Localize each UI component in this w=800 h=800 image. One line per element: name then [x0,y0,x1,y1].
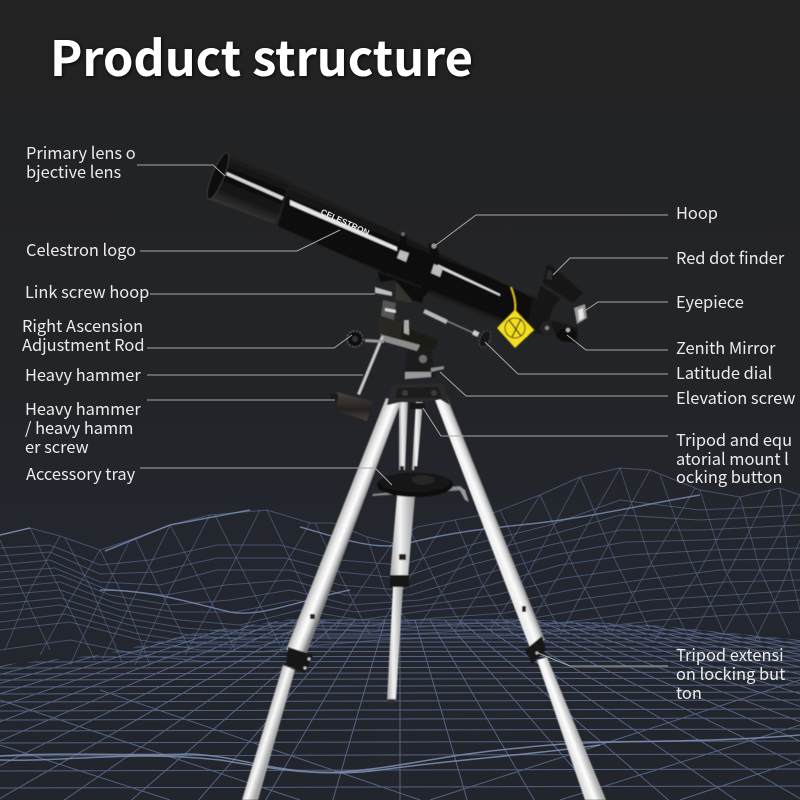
callout: Tripod extension locking button: Tripod extensi [676,642,784,666]
callout: Celestron logo [26,230,340,261]
declination slow-motion rod [423,309,448,324]
elevation screw [431,366,444,372]
callout: Heavy hammer / heavy hammer screw: Heavy hammer [25,396,141,420]
callout: Hoop [436,200,718,245]
tripod: left leg [242,398,401,800]
tripod [242,397,606,800]
callout: Latitude dial: Latitude dial [676,360,772,384]
callout: Latitude dial [485,342,772,384]
callout: Heavy hammer: Heavy hammer [25,362,141,386]
callout: Tripod and equatorial mount locking button: atorial mount l [676,446,789,470]
callout: Accessory tray [26,461,392,485]
warning tag string [511,287,515,311]
mount head with bolt [403,346,436,380]
callout: Elevation screw: Elevation screw [676,385,795,409]
tripod: centre leg [387,400,423,703]
callout: Tripod extension locking button: ton [676,680,702,704]
callout: Accessory tray: Accessory tray [26,461,136,485]
focuser [526,296,552,335]
title: Product structure [50,20,473,90]
tube highlight [290,200,397,251]
counterweight shaft [357,336,384,395]
perspective floor [0,620,800,800]
callout: Heavy hammer / heavy hammer screw: / heavy hamm [25,415,133,439]
tube rings [378,232,443,303]
callout: Zenith Mirror: Zenith Mirror [676,335,776,359]
callout: Zenith Mirror [567,335,776,359]
callout: Primary lens or objective lens: Primary lens o [26,140,136,164]
callout: Red dot finder: Red dot finder [676,245,785,269]
callout: Right Ascension Adjustment Rod: Adjustment Rod [22,332,145,356]
wireframe terrain [0,468,800,800]
callout: Eyepiece [583,289,744,313]
RA block [377,317,403,338]
counterweight [337,392,373,421]
dew shield [203,151,290,224]
link screw [375,287,392,296]
callout: Hoop: Hoop [676,200,718,224]
tripod head [387,383,450,405]
callout: Celestron logo: Celestron logo [26,237,136,261]
warning tag [497,310,534,348]
tripod: right leg [435,397,606,800]
callout: Elevation screw [440,372,795,409]
callout: Tripod extension locking button [538,642,785,704]
telescope [203,151,587,348]
callout: Eyepiece: Eyepiece [676,289,744,313]
callout: Heavy hammer / heavy hammer screw: er screw [25,434,89,458]
brand logo: CELESTRON [319,207,371,238]
equatorial mount and tripod head [330,281,493,421]
callout: Tripod and equatorial mount locking button: Tripod and equ [676,427,792,451]
callout: Heavy hammer / heavy hammer screw [25,396,335,458]
right ascension rod [365,339,384,343]
callout: Primary lens or objective lens: bjective lens [26,159,122,183]
callout: Link screw hoop: Link screw hoop [25,279,149,303]
red dot finder [543,265,583,303]
callout: Tripod and equatorial mount locking button [423,408,792,488]
callout: Tripod and equatorial mount locking button: ocking button [676,464,783,488]
accessory tray [372,466,469,502]
star diagonal [550,320,578,344]
callout: Red dot finder [553,245,785,275]
main tube [278,183,540,338]
callout: Right Ascension Adjustment Rod [22,313,352,356]
callout: Primary lens or objective lens [26,140,225,183]
callout: Tripod extension locking button: on locking but [676,661,785,685]
callout: Right Ascension Adjustment Rod: Right Ascension [22,313,143,337]
eyepiece [574,304,587,324]
upper mount block [395,281,414,303]
